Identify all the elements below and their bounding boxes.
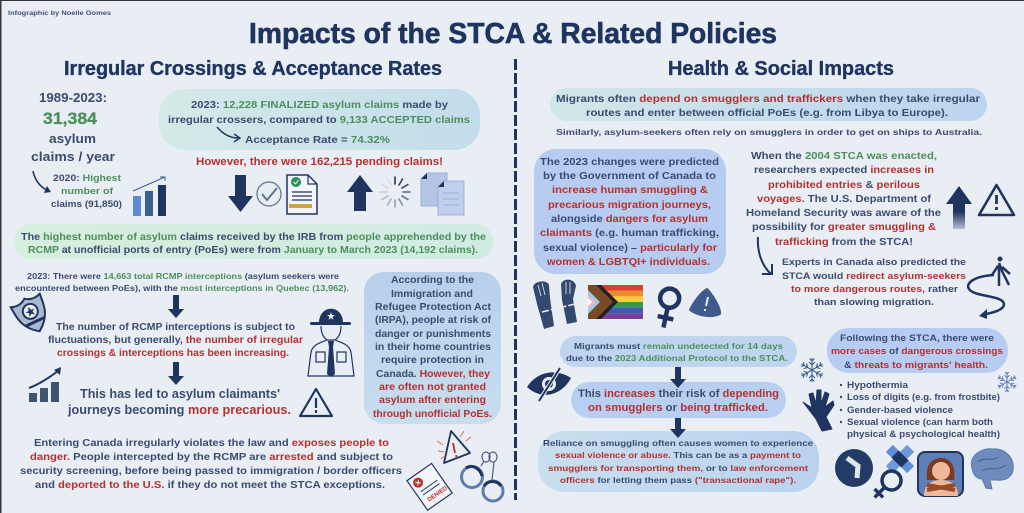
icon: check circle bbox=[257, 182, 281, 206]
icon: rising bar chart bbox=[133, 177, 166, 216]
panel: IRPA protection: require protection in bbox=[381, 355, 484, 366]
text: total RCMP interceptions: 2023: There were 14,663 total RCMP interceptions (asylum seekers were bbox=[27, 271, 339, 281]
text: RCMP interceptions fluctuate: The number of RCMP interceptions is subject to bbox=[56, 322, 295, 333]
icon: injured knee bbox=[835, 449, 873, 487]
icon: bandage bbox=[879, 438, 921, 480]
icon: small snowflake bbox=[997, 372, 1017, 392]
text: journeys more precarious: This has led to asylum claimants' bbox=[80, 386, 280, 401]
title: Impacts of the STCA & Related Policies bbox=[249, 18, 777, 50]
panel: following the STCA: & threats to migrants' health. bbox=[844, 360, 988, 371]
stat: asylum claims per year: 1989-2023: bbox=[39, 90, 107, 105]
panel: 2023 changes predicted: alongside dangers for asylum bbox=[551, 214, 708, 225]
stat: asylum claims per year bbox=[31, 90, 115, 164]
arrow: down to reliance bbox=[670, 418, 686, 438]
text: 2004 STCA enacted: researchers expected increases in bbox=[754, 165, 934, 176]
text: 2004 STCA enacted: When the 2004 STCA was enacted, bbox=[751, 151, 937, 162]
text: 2004 STCA enacted: trafficking from the STCA! bbox=[775, 237, 913, 248]
note: 2020 highest claims bbox=[33, 171, 122, 210]
text: experts in Canada bbox=[782, 257, 966, 308]
text: entering Canada irregularly: Entering Canada irregularly violates the law and exposes people to bbox=[34, 438, 389, 449]
panel: 2023 changes predicted: precarious migration journeys, bbox=[548, 200, 711, 211]
panel: IRPA protection: (IRPA), people at risk of bbox=[375, 315, 492, 326]
panel: 2023 changes predicted: women & LGBTQI+ individuals. bbox=[546, 257, 710, 268]
icon: warning triangle bbox=[300, 389, 332, 416]
icon: growth chart bbox=[29, 367, 61, 402]
panel: increased risk: on smugglers or being trafficked. bbox=[588, 402, 768, 414]
panel: remain undetected: due to the 2023 Additional Protocol to the STCA. bbox=[566, 353, 788, 363]
panel: IRPA protection: asylum after entering bbox=[379, 395, 486, 406]
arrow: down to precarious journeys bbox=[168, 362, 184, 385]
icon: denied document: DENIED bbox=[427, 485, 449, 503]
note: 2020 highest claims: number of bbox=[61, 186, 114, 197]
panel: migrants depend on smugglers: routes and enter between official PoEs (e.g. from Libya to Europe). bbox=[586, 108, 948, 119]
panel: 2023 changes predicted: claimants (e.g. human trafficking, bbox=[540, 228, 719, 239]
stat: asylum claims per year: 31,384 bbox=[43, 109, 98, 128]
panel: 2023 finalized claims: 2023: 12,228 FINALIZED asylum claims made by bbox=[191, 100, 448, 111]
icon: distressed person portrait bbox=[918, 452, 963, 496]
panel: 2023 changes predicted: by the Government of Canada to bbox=[543, 171, 716, 182]
icon: handcuffs bbox=[462, 452, 503, 501]
arrow: to acceptance rate bbox=[217, 127, 240, 142]
text: journeys more precarious bbox=[67, 386, 291, 417]
text: experts in Canada: Experts in Canada also predicted the bbox=[782, 257, 966, 268]
list: health threats: Sexual violence (can harm both bbox=[847, 417, 993, 428]
panel: 2023 finalized claims: irregular crossers, compared to 9,133 ACCEPTED claims bbox=[168, 115, 470, 126]
icon: denied document bbox=[407, 463, 452, 510]
panel: IRPA protection bbox=[364, 272, 501, 424]
panel: highest number of claims: RCMP at unofficial ports of entry (PoEs) were from January to March 2023 (14,192 claims). bbox=[28, 245, 478, 256]
icon: female symbol tilted bbox=[868, 467, 905, 504]
text: entering Canada irregularly bbox=[20, 438, 402, 491]
panel: following the STCA: more cases of dangerous crossings bbox=[831, 346, 1003, 357]
panel: 2023 finalized claims bbox=[159, 89, 480, 150]
panel: migrants depend on smugglers: Migrants often depend on smugglers and traffickers when they take irregular bbox=[556, 94, 980, 105]
arrow: down to fluctuations bbox=[168, 295, 184, 318]
text: entering Canada irregularly: security screening, before being passed to immigration / border officers bbox=[20, 466, 402, 477]
panel: 2023 changes predicted bbox=[534, 149, 726, 274]
panel: remain undetected: Migrants must remain undetected for 14 days bbox=[574, 341, 783, 351]
stat: asylum claims per year: claims / year bbox=[31, 149, 115, 164]
list: health threats: Gender-based violence bbox=[847, 405, 953, 416]
panel: remain undetected bbox=[560, 336, 797, 367]
text: 2004 STCA enacted: possibility for greater smuggling & bbox=[752, 222, 936, 233]
icon: brain bbox=[971, 449, 1013, 489]
panel: IRPA protection: in their home countries bbox=[375, 342, 491, 353]
icon: RCMP officer bbox=[308, 309, 354, 377]
panel: increased risk: This increases their risk of depending bbox=[578, 388, 779, 400]
panel: migrants depend on smugglers bbox=[550, 88, 987, 121]
panel: following the STCA bbox=[827, 328, 1008, 373]
list: health threats: Loss of digits (e.g. from frostbite) bbox=[847, 392, 1000, 403]
panel: sexual violence: smugglers for transporting them, or to law enforcement bbox=[548, 463, 808, 473]
arrow: curved to experts text bbox=[758, 237, 772, 274]
icon: fading up arrow bbox=[946, 186, 972, 229]
heading: health and social impacts: Health & Social Impacts bbox=[668, 58, 894, 80]
text: experts in Canada: to more dangerous routes, rather bbox=[791, 284, 958, 295]
text: 2004 STCA enacted: prohibited entries & perilous bbox=[768, 180, 920, 191]
panel: sexual violence bbox=[538, 431, 819, 492]
list: health threats: Hypothermia bbox=[847, 380, 909, 391]
arrow: down to increased risk bbox=[670, 367, 686, 388]
panel: highest number of claims bbox=[14, 224, 493, 259]
text: ships to Australia: Similarly, asylum-seekers often rely on smugglers in order to get on ships to Australia. bbox=[556, 127, 982, 137]
panel: sexual violence: sexual violence or abuse. This can be as a payment to bbox=[555, 450, 801, 460]
panel: IRPA protection: through unofficial PoEs. bbox=[373, 409, 492, 420]
stat: asylum claims per year: asylum bbox=[49, 131, 96, 146]
panel: IRPA protection: According to the bbox=[391, 275, 474, 286]
icon: snowflake bbox=[800, 358, 824, 382]
text: entering Canada irregularly: and deported to the U.S. if they do not meet the STCA exceptions. bbox=[35, 480, 385, 491]
panel: following the STCA: Following the STCA, there were bbox=[840, 333, 994, 344]
icon: progress pride flag bbox=[588, 285, 643, 319]
panel: IRPA protection: Refugee Protection Act bbox=[375, 302, 492, 313]
note: 2020 highest claims: claims (91,850) bbox=[51, 199, 122, 210]
text: experts in Canada: than slowing migration. bbox=[814, 297, 934, 308]
panel: sexual violence: Reliance on smuggling often causes women to experience bbox=[543, 438, 813, 448]
text: 2004 STCA enacted: Homeland Security was aware of the bbox=[746, 208, 941, 219]
icon: frostbitten hand bbox=[803, 390, 834, 431]
icon: warning with alert lines bbox=[437, 431, 471, 463]
panel: IRPA protection: are often not granted bbox=[379, 382, 486, 393]
arrow: curved to 2020 note bbox=[33, 171, 49, 191]
text: entering Canada irregularly: danger. People intercepted by the RCMP are arrested and subject to bbox=[30, 452, 393, 463]
panel: IRPA protection: Canada. However, they bbox=[376, 369, 490, 380]
icon: police badge bbox=[10, 292, 54, 338]
icon: rounded warning bbox=[690, 289, 720, 316]
text: 2004 STCA enacted bbox=[746, 151, 941, 248]
icon: crossed-out eye bbox=[527, 368, 571, 401]
panel: highest number of claims: The highest number of asylum claims received by the IRB from people apprehended by the bbox=[21, 232, 486, 243]
panel: 2023 changes predicted: The 2023 changes were predicted bbox=[540, 157, 719, 168]
icon: bound fists bbox=[533, 280, 577, 329]
icon: down arrow bbox=[228, 175, 253, 212]
list: health threats bbox=[840, 380, 1000, 440]
icon: pending documents bbox=[421, 173, 464, 215]
text: RCMP interceptions fluctuate bbox=[48, 322, 303, 359]
note: 2020 highest claims: 2020: Highest bbox=[53, 173, 122, 184]
panel: 2023 changes predicted: sexual violence) – particularly for bbox=[543, 243, 717, 254]
text: 2004 STCA enacted: voyages. The U.S. Department of bbox=[757, 194, 932, 205]
text: RCMP interceptions fluctuate: fluctuations, but generally, the number of irregular bbox=[48, 335, 303, 346]
panel: sexual violence: officers for letting them pass ("transactional rape"). bbox=[560, 475, 796, 485]
icon: warning triangle bbox=[979, 185, 1014, 215]
text: experts in Canada: STCA would redirect asylum-seekers bbox=[782, 271, 966, 282]
icon: female symbol bbox=[654, 287, 681, 329]
callout: pending claims: However, there were 162,215 pending claims! bbox=[196, 156, 443, 168]
icon: up arrow bbox=[347, 175, 373, 211]
text: total RCMP interceptions bbox=[15, 271, 349, 293]
icon: walker on winding path bbox=[968, 256, 1010, 319]
credit line: Infographic by Noelle Gomes bbox=[8, 10, 111, 17]
panel: increased risk bbox=[571, 382, 786, 418]
text: RCMP interceptions fluctuate: crossings & interceptions has been increasing. bbox=[57, 348, 289, 359]
text: total RCMP interceptions: encountered between PoEs), with the most interceptions in Quebec (13,962). bbox=[15, 283, 349, 293]
icon: loading spinner bbox=[380, 177, 410, 207]
heading: irregular crossings: Irregular Crossings & Acceptance Rates bbox=[64, 58, 442, 80]
section divider bbox=[514, 59, 517, 500]
text: journeys more precarious: journeys becoming more precarious. bbox=[67, 402, 291, 417]
list: health threats: physical & psychological health) bbox=[847, 429, 1000, 440]
panel: IRPA protection: danger or punishments bbox=[375, 329, 491, 340]
icon: accepted document bbox=[287, 175, 317, 214]
panel: 2023 changes predicted: increase human smuggling & bbox=[552, 185, 708, 196]
panel: IRPA protection: Immigration and bbox=[391, 289, 473, 300]
panel: 2023 finalized claims: Acceptance Rate = 74.32% bbox=[245, 135, 390, 146]
